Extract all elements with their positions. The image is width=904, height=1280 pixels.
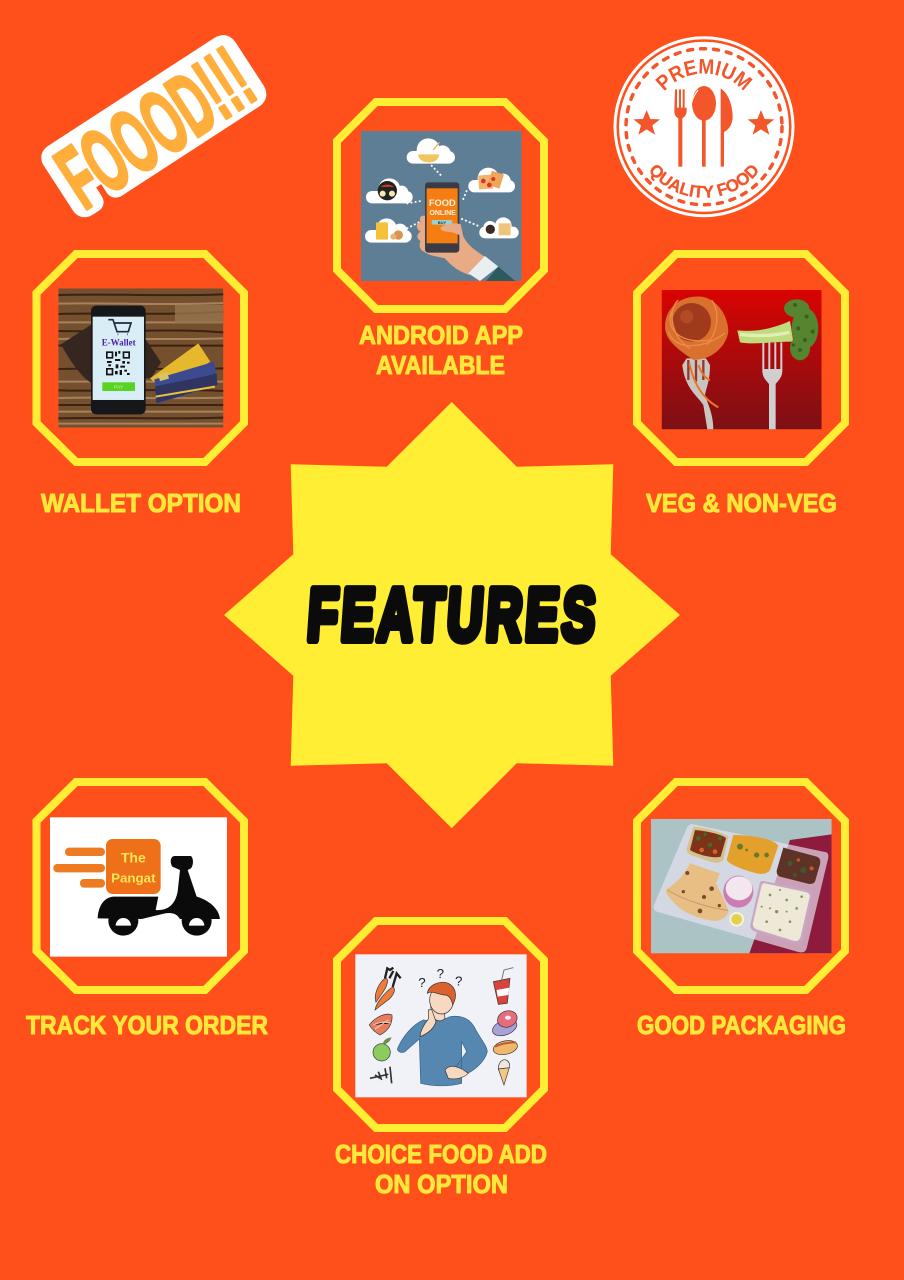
panel: android app (337, 102, 544, 380)
illustration: thinking man with food: ? (437, 966, 444, 981)
logo: the pangat scooter: Pangat (111, 871, 156, 886)
label: track your order: TRACK YOUR ORDER (26, 1010, 268, 1040)
panel: good packaging (637, 782, 846, 1040)
label: android app available (359, 320, 523, 380)
label: veg and non-veg: VEG & NON-VEG (646, 488, 837, 518)
photo: e-wallet phone (58, 288, 223, 428)
photo: spaghetti and broccoli forks (662, 290, 822, 429)
badge: premium quality food (614, 36, 794, 218)
label: choice food add on option: ON OPTION (375, 1169, 508, 1199)
illustration: thinking man with food: ? (455, 974, 462, 989)
label: choice food add on option: CHOICE FOOD ADD (335, 1139, 547, 1169)
heading: features: FEATURES (305, 573, 602, 656)
photo: meal tray (651, 819, 832, 953)
badge: premium quality food: QUALITY FOOD (650, 165, 758, 198)
label: choice food add on option (335, 1139, 547, 1199)
octagon frame (637, 782, 845, 990)
logo: the pangat scooter (50, 817, 227, 957)
label: android app available: ANDROID APP (359, 320, 523, 350)
panel: track your order (26, 782, 268, 1040)
illustration: thinking man with food (355, 954, 527, 1097)
label: android app available: AVAILABLE (376, 350, 505, 380)
illustration: food online phone: FOOD (429, 198, 456, 208)
panel: wallet option (36, 254, 244, 518)
octagon frame (337, 102, 544, 309)
star burst (224, 402, 680, 828)
panel: veg and non-veg (637, 254, 845, 518)
photo: e-wallet phone: PAY (114, 385, 124, 391)
title star: features (224, 402, 680, 828)
panel: choice food add on option (335, 921, 547, 1199)
illustration: food online phone (361, 131, 522, 281)
logo: the pangat scooter: The (121, 849, 146, 865)
badge: premium quality food: PREMIUM (655, 59, 752, 91)
photo: e-wallet phone: E-Wallet (102, 337, 136, 347)
illustration: food online phone: BUY (438, 220, 447, 225)
illustration: thinking man with food: ? (418, 975, 426, 990)
sticker: FOOOD!!! (33, 24, 278, 233)
octagon frame (36, 254, 244, 462)
octagon frame (36, 782, 244, 990)
label: wallet option: WALLET OPTION (41, 488, 241, 518)
octagon frame (637, 254, 845, 462)
octagon frame (337, 921, 544, 1128)
illustration: food online phone: ONLINE (429, 210, 456, 217)
label: good packaging: GOOD PACKAGING (637, 1010, 846, 1040)
